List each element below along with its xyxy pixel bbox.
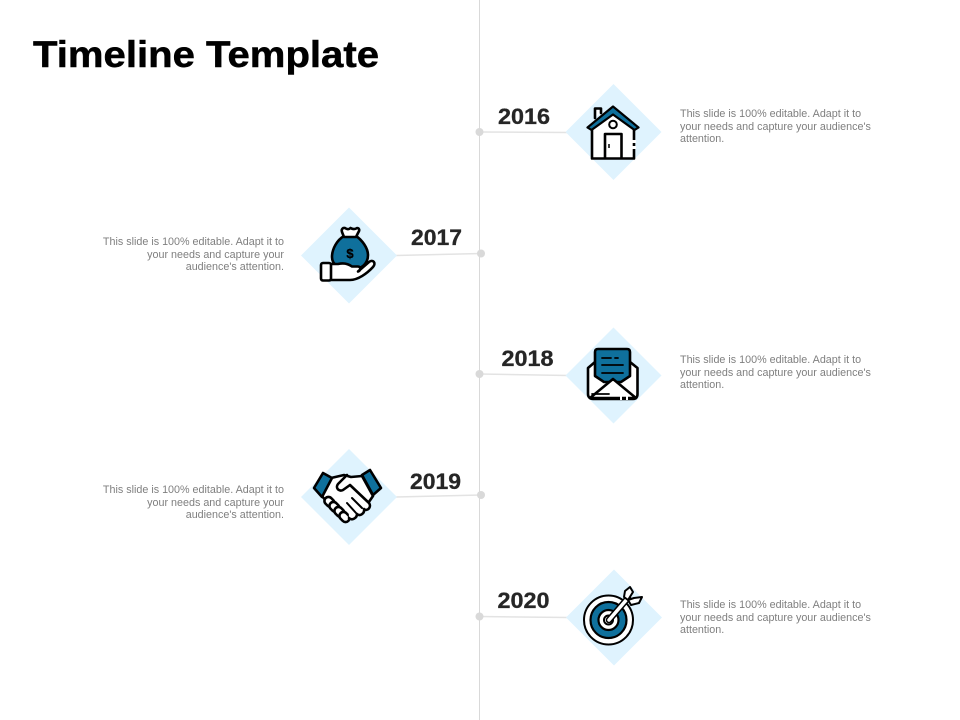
connector 2020 [476, 612, 568, 620]
diamond 2018 [566, 328, 662, 424]
year 2020: 2020 [498, 588, 550, 613]
description 2019: your needs and capture your [147, 497, 284, 509]
timeline vertical axis [478, 0, 480, 720]
description 2018: your needs and capture your audience's [680, 367, 871, 379]
description 2016: attention. [680, 133, 724, 145]
milestone 2019 [103, 449, 485, 545]
icon: handshake [314, 470, 381, 524]
connector 2017 [396, 250, 485, 258]
icon: money bag on hand: $ [346, 246, 354, 261]
description 2016: This slide is 100% editable. Adapt it to [680, 108, 861, 120]
description 2016: your needs and capture your audience's [680, 121, 871, 133]
title: Timeline Template [33, 34, 379, 75]
icon: money bag on hand [321, 228, 374, 280]
year 2018: 2018 [502, 346, 554, 371]
milestone 2016 [476, 84, 871, 180]
diamond 2016 [566, 84, 662, 180]
connector 2018 [476, 370, 568, 378]
diamond 2020 [566, 570, 662, 666]
description 2017: This slide is 100% editable. Adapt it to [103, 236, 284, 248]
description 2017: audience's attention. [186, 261, 284, 273]
diamond 2017 [301, 208, 397, 304]
milestone 2017 [103, 208, 485, 304]
icon: house [588, 106, 638, 158]
description 2019: audience's attention. [186, 509, 284, 521]
milestone 2018 [476, 328, 871, 424]
icon: target with arrow [584, 587, 642, 644]
connector 2016 [476, 128, 568, 136]
year 2016: 2016 [498, 104, 550, 129]
milestone 2020 [476, 570, 871, 666]
year 2019: 2019 [410, 469, 461, 494]
diamond 2019 [301, 449, 397, 545]
description 2020: attention. [680, 624, 724, 636]
description 2019: This slide is 100% editable. Adapt it to [103, 484, 284, 496]
description 2018: attention. [680, 379, 724, 391]
description 2018: This slide is 100% editable. Adapt it to [680, 354, 861, 366]
description 2017: your needs and capture your [147, 249, 284, 261]
year 2017: 2017 [411, 225, 462, 250]
connector 2019 [396, 491, 485, 499]
description 2020: your needs and capture your audience's [680, 612, 871, 624]
icon: open envelope with letter [588, 349, 638, 400]
description 2020: This slide is 100% editable. Adapt it to [680, 599, 861, 611]
